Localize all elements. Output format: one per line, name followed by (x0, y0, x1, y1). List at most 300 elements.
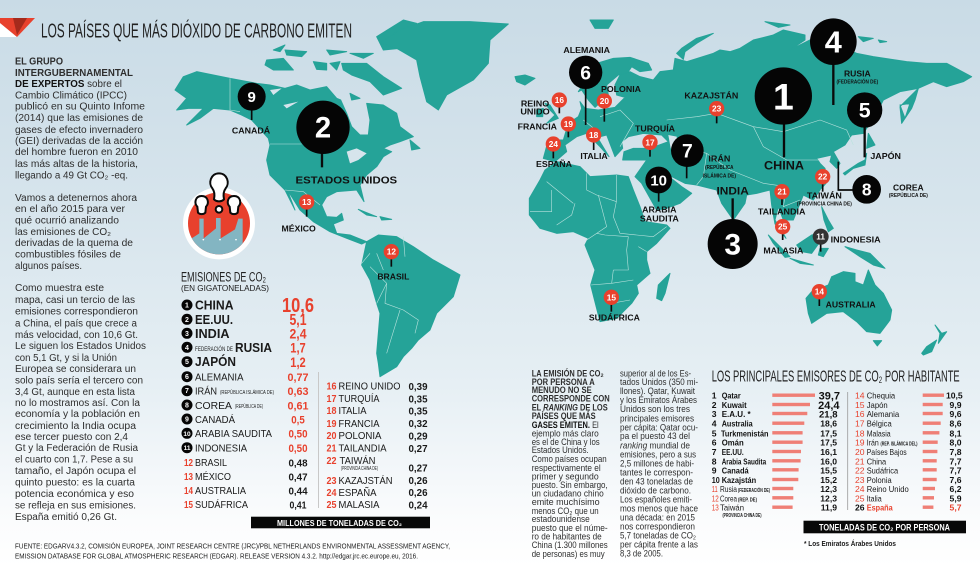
row Korea: 12 (712, 493, 719, 503)
row 8 Korea (182, 400, 308, 412)
row Netherlands: 7,8 (950, 447, 962, 457)
row 14 Australia (184, 485, 308, 497)
marker 22 Taiwan: 22 (818, 172, 828, 182)
row 20 Poland: 20 (326, 430, 337, 442)
land: Eurasia (543, 30, 972, 238)
row South Africa: Sudáfrica (867, 465, 898, 475)
row Italy: 5,9 (950, 493, 962, 503)
row 12 Brazil: 0,48 (288, 457, 308, 469)
text block: per-person emissions column 2: dióxido de carbono. (620, 484, 691, 495)
text block: per-person emissions column 2: una década: en 2015 (620, 511, 695, 522)
text block: per-person emissions column 1 (532, 367, 610, 559)
row Germany (855, 409, 962, 419)
label Kazakhstan: KAZAJSTÁN (684, 90, 738, 100)
row 1 China: CHINA (195, 298, 234, 313)
row 13 Mexico: 0,47 (288, 471, 308, 483)
text block: per-person emissions column 1: estadounidense (532, 513, 590, 524)
text block: year 2015: Vamos a detenernos ahora (15, 193, 137, 204)
text block: country analysis: ese tercer puesto con 2,4 (15, 432, 128, 443)
label Mexico: MÉXICO (281, 224, 316, 234)
row Spain: 5,7 (950, 503, 962, 513)
row 3 India (182, 326, 307, 342)
row China: 21 (855, 456, 865, 466)
land: islands (515, 20, 918, 301)
row USA: 7 (712, 447, 717, 457)
text block: IPCC intro: las más altas de la historia, (15, 159, 138, 170)
text block: per-person emissions column 2: emisiones, pero a sus (620, 448, 696, 459)
row 14 Australia: AUSTRALIA (195, 485, 246, 497)
row UK: Reino Unido (867, 484, 909, 494)
row Canada: Canadá (722, 465, 749, 475)
text block: per-person emissions column 2: per cápita: Qatar ocu- (620, 421, 698, 432)
row Russia: 12,3 (820, 484, 837, 494)
row 25 Malaysia: MALASIA (338, 499, 380, 511)
row 7 Iran (182, 384, 308, 398)
row 13 Mexico (184, 470, 308, 483)
marker 3 India: 3 (724, 229, 741, 262)
row 20 Poland (326, 430, 428, 442)
right ranking 14-26 (855, 391, 963, 513)
row 19 France: 19 (326, 418, 337, 430)
text block: per-person emissions column 2: tantes le correspon- (620, 466, 693, 477)
row 15 South Africa: 15 (184, 499, 193, 511)
row UAE (712, 409, 838, 420)
row Belgium: 8,6 (950, 419, 962, 429)
row Iran: 19 (855, 438, 865, 448)
row 9 Canada (182, 413, 305, 426)
row 23 Kazakhstan: 23 (326, 475, 337, 487)
text block: per-person emissions column 1: menos CO₂ que un (532, 505, 599, 516)
lakes (270, 88, 367, 163)
row Saudi Arabia (712, 456, 837, 466)
label Iran: ISLÁMICA DE) (703, 172, 736, 179)
row 25 Malaysia: 0,24 (408, 500, 428, 511)
map: Americas (175, 20, 508, 377)
row 5 Japan (182, 354, 306, 370)
row Malaysia: Malasia (867, 428, 891, 438)
row 9 Canada: 0,5 (291, 414, 305, 426)
row 2 USA (182, 312, 307, 329)
row 16 UK: REINO UNIDO (338, 380, 400, 392)
text block: per-person emissions column 2: 5,7 toneladas de CO₂ (620, 529, 696, 540)
row 13 Mexico: 13 (184, 471, 193, 483)
row Oman: Omán (722, 438, 744, 448)
row Canada: 15,5 (820, 465, 837, 475)
row 9 Canada: CANADÁ (195, 413, 235, 426)
text block: IPCC intro: llegando a 49 Gt CO₂ -eq. (15, 170, 128, 182)
label Russia (836, 68, 878, 86)
text block: country analysis: tamaño, el Japón ocupa el (15, 466, 136, 477)
row 8 Korea: 0,61 (288, 400, 308, 412)
marker 18 Italy (586, 127, 601, 150)
row Oman (712, 438, 837, 448)
row Russia: (FEDERACIÓN DE) (738, 486, 770, 494)
row 10 Saudi Arabia: 10 (183, 431, 191, 438)
row Netherlands: Países Bajos (867, 447, 907, 457)
marker 16 UK: 16 (555, 95, 564, 105)
row Oman: 6 (712, 438, 717, 448)
row Japan: 9,9 (950, 400, 962, 410)
row 1 China: 1 (185, 302, 189, 310)
heading: CO2 emissions (181, 270, 269, 293)
row 23 Kazakhstan: KAZAJSTÁN (338, 474, 392, 487)
row 19 France: 0,32 (408, 419, 428, 430)
marker 23 Kazakhstan (709, 101, 724, 123)
row Poland: 7,6 (950, 475, 962, 485)
text block: IPCC intro: gases de efecto invernadero (15, 125, 143, 136)
marker 1 China (755, 67, 812, 157)
row 2 USA: 5,1 (290, 312, 307, 329)
text block: country analysis: economía y la población en (15, 409, 140, 420)
row Kazakhstan (712, 475, 837, 485)
text block: per-person emissions column 2: 8,3 de 2005. (620, 547, 663, 558)
row 14 Australia: 0,44 (288, 485, 308, 497)
marker 5 Japan: 5 (859, 99, 871, 123)
row 18 Italy (326, 405, 428, 417)
row 22 Taiwan: 22 (326, 455, 337, 467)
label UK (520, 98, 550, 117)
row Korea: Corea (720, 493, 737, 503)
row Qatar: 1 (712, 391, 717, 401)
marker 24 Spain (546, 136, 561, 158)
label Japan: JAPÓN (870, 150, 901, 161)
text block: per-person emissions column 1: POR PERSONA A (532, 376, 595, 387)
row 6 Germany: ALEMANIA (195, 372, 244, 384)
row 7 Iran: (REPÚBLICA ISLÁMICA DE) (220, 389, 274, 396)
label China: CHINA (764, 158, 804, 172)
row 21 Thailand: 21 (326, 442, 337, 454)
label Brazil: BRASIL (377, 271, 409, 281)
text block: per-person emissions column 1: emite muchísimo (532, 496, 600, 507)
label Poland: POLONIA (601, 84, 641, 94)
marker 16 UK (552, 92, 567, 113)
row Kazakhstan: Kazajstán (722, 475, 756, 485)
text block: IPCC intro: EL GRUPO (15, 56, 63, 68)
text block: country analysis: con 5,1 Gt, y si la Unión (15, 353, 117, 364)
text block: per-person emissions column 2: principales emisores (620, 412, 694, 423)
text block: country analysis: Europea se considerara un (15, 364, 136, 375)
text block: country analysis (15, 283, 146, 523)
row Korea (712, 493, 837, 503)
text block: per-person emissions column 2 (620, 367, 698, 558)
row Australia: Australia (722, 419, 753, 429)
row Saudi Arabia: 16,0 (820, 456, 837, 466)
label Korea: COREA (893, 182, 924, 192)
row China: 7,7 (950, 456, 962, 466)
marker 20 Poland: 20 (600, 96, 609, 106)
text block: per-person emissions column 2: Los españoles emiti- (620, 493, 692, 504)
label UK: REINO (521, 98, 550, 108)
label Taiwan (797, 190, 852, 208)
marker 23 Kazakhstan: 23 (712, 104, 722, 114)
row 24 Spain: ESPAÑA (338, 486, 376, 499)
row 11 Indonesia: INDONESIA (195, 442, 247, 454)
row Canada (712, 465, 837, 475)
text block: year 2015: las emisiones de CO₂ (15, 227, 111, 238)
marker 24 Spain: 24 (549, 139, 558, 149)
marker 18 Italy: 18 (589, 130, 599, 140)
text block: IPCC intro: del hombre fueron en 2010 (15, 147, 138, 158)
row 21 Thailand (326, 442, 428, 455)
row Russia: Rusia (720, 484, 737, 494)
row Czechia (855, 391, 963, 401)
row Oman: 17,5 (820, 438, 837, 448)
row 3 India: INDIA (195, 326, 230, 341)
row Czechia: 10,5 (946, 391, 963, 401)
row 7 Iran: 7 (185, 388, 189, 395)
marker 14 Australia: 14 (815, 287, 824, 297)
text block: IPCC intro: DE EXPERTOS sobre el (15, 79, 122, 90)
row 19 France (326, 418, 428, 430)
text block: per-person emissions column 2: pa el puesto 43 del (620, 430, 690, 441)
marker 3 India (708, 198, 758, 269)
label South Africa: SUDÁFRICA (589, 312, 640, 322)
marker 14 Australia (812, 284, 827, 306)
text block: per-person emissions column 1: puesto. Sin embargo, (532, 479, 608, 490)
text block: year 2015: qué ocurrió analizando (15, 216, 119, 226)
row Iran: (REP. ISLÁMICA DEL) (880, 441, 918, 448)
text block: per-person emissions column 1: China (1.300 millones (532, 539, 608, 550)
row UK (855, 484, 962, 494)
row 4 Russia: 4 (185, 345, 189, 352)
row 21 Thailand: 0,27 (408, 444, 428, 455)
row 16 UK: 0,39 (408, 382, 428, 393)
text block: country analysis: mapa, casi un tercio de las (15, 295, 135, 306)
row 10 Saudi Arabia (182, 428, 308, 441)
row 22 Taiwan: (PROVINCIA CHINA DE) (341, 466, 378, 472)
text block: per-person emissions column 2: Unidos son los tres (620, 403, 690, 414)
text block: IPCC intro: INTERGUBERNAMENTAL (15, 68, 133, 79)
row Turkmenistan: 5 (712, 428, 717, 438)
row 8 Korea: (REPÚBLICA DE) (235, 403, 263, 410)
label Spain: ESPAÑA (536, 159, 572, 169)
label Turkey: TURQUÍA (635, 124, 675, 134)
label USA: ESTADOS UNIDOS (295, 175, 397, 186)
row Kuwait (712, 400, 840, 412)
marker 5 Japan (847, 92, 882, 157)
text block: per-person emissions column 1: respectivamente el (532, 462, 601, 473)
text block: year 2015: combustibles fósiles de (15, 250, 121, 260)
inland seas (603, 95, 678, 152)
text block: per-person emissions column 2: 2,5 millones de habi- (620, 457, 694, 468)
text block: per-person emissions column 2: superior al de los Es- (620, 367, 691, 378)
land: Africa (529, 162, 670, 322)
row Canada: 9 (712, 465, 717, 475)
markers and labels: Americas (183, 83, 409, 281)
heading: CO2 emissions: EMISIONES DE CO₂ (181, 270, 266, 284)
marker 13 Mexico: 13 (302, 197, 312, 207)
marker 6 Germany: 6 (580, 63, 591, 84)
row Italy (855, 493, 962, 503)
row Japan (855, 400, 962, 410)
label Italy: ITALIA (580, 151, 608, 161)
text block: per-person emissions column 1: GASES EMITEN. El (532, 419, 599, 430)
row Japan: Japón (867, 400, 888, 410)
label Saudi Arabia: SAUDITA (640, 214, 679, 224)
marker 9 Canada: 9 (247, 89, 256, 106)
row 7 Iran: 0,63 (288, 386, 308, 398)
row 25 Malaysia (326, 499, 428, 511)
row Belgium: 17 (855, 419, 865, 429)
panel: CO2 emissions ranking (181, 270, 430, 528)
row 15 South Africa: 0,41 (290, 499, 307, 511)
row UAE: 21,8 (819, 410, 838, 420)
row 14 Australia: 14 (184, 485, 193, 497)
panel: main emitters per inhabitant (712, 368, 966, 548)
row 4 Russia: 1,7 (290, 340, 306, 356)
text block: year 2015 (15, 193, 137, 272)
row 6 Germany: 0,77 (288, 372, 308, 384)
text block: year 2015: algunos países. (15, 261, 82, 272)
row 11 Indonesia: 11 (184, 445, 191, 452)
text block: year 2015: en el año 2015 para ver (15, 204, 126, 215)
marker 6 Germany (569, 56, 602, 125)
row Kazakhstan: 10 (712, 475, 720, 485)
row 4 Russia: RUSIA (235, 340, 273, 355)
marker 4 Russia (810, 18, 857, 105)
left ranking 1-13 (712, 390, 840, 519)
row 2 USA: EE.UU. (195, 312, 233, 327)
label Russia: (FEDERACIÓN DE) (836, 78, 878, 86)
row 24 Spain (326, 486, 428, 499)
row Turkmenistan: Turkmenistán (721, 428, 768, 438)
text block: per-person emissions column 1: es el de China y los (532, 436, 600, 447)
marker 20 Poland (597, 93, 612, 122)
marker 17 Turkey: 17 (645, 137, 655, 147)
text block: IPCC intro: (GEI) derivadas de la acción (15, 136, 143, 147)
row 24 Spain: 0,26 (408, 488, 428, 499)
row Spain: España (867, 503, 893, 513)
text block: per-person emissions column 1: Como países ocupan (532, 453, 607, 464)
row Italy: Italia (867, 493, 882, 503)
marker 9 Canada (238, 83, 266, 120)
text block: per-person emissions column 1: primer y segundo (532, 470, 599, 481)
marker 7 Iran (671, 134, 704, 178)
text block: per-person emissions column 1: ro de habitantes de (532, 530, 602, 541)
marker 11 Indonesia (813, 229, 829, 252)
marker 15 South Africa: 15 (607, 292, 616, 302)
text block: country analysis: Le siguen los Estados Unidos (15, 341, 146, 352)
row Taiwan: 11,9 (821, 503, 837, 513)
borders: Americas (230, 78, 418, 353)
logo: red triangle (0, 18, 35, 37)
text block: country analysis: 3,4 Gt, aunque en esta lista (15, 387, 135, 398)
row Qatar (712, 390, 840, 402)
label Australia: AUSTRALIA (826, 299, 876, 309)
row Taiwan: 13 (712, 503, 719, 513)
label Thailand: TAILANDIA (758, 207, 805, 217)
text block: per-person emissions column 2: tados Unidos (350 mi- (620, 376, 698, 387)
row 2 USA: 2 (185, 317, 189, 324)
row 22 Taiwan: 0,27 (408, 463, 428, 474)
unit bar: tonnes per person (804, 521, 966, 533)
row Belgium: Bélgica (867, 419, 892, 429)
land: Greenland (380, 22, 508, 110)
row Italy: 25 (855, 493, 865, 503)
heading: CO2 emissions: (EN GIGATONELADAS) (181, 284, 269, 293)
text block: year 2015: derivadas de la quema de (15, 238, 133, 249)
label UK: UNIDO (520, 107, 550, 117)
row 23 Kazakhstan (326, 474, 428, 487)
label Iran: IRÁN (708, 153, 730, 163)
row 17 Turkey (326, 392, 428, 405)
row Netherlands (855, 447, 962, 457)
row 16 UK (326, 380, 428, 393)
marker 25 Malaysia (775, 219, 790, 240)
row Turkmenistan: 17,5 (820, 428, 837, 438)
unit bar: millions of tonnes: MILLONES DE TONELADAS DE CO₂ (277, 518, 402, 528)
marker 10 Saudi Arabia (645, 167, 672, 202)
row South Africa (855, 465, 962, 475)
marker 11 Indonesia: 11 (816, 232, 825, 242)
row 3 India: 2,4 (290, 326, 307, 342)
marker 13 Mexico (299, 194, 314, 217)
row 9 Canada: 9 (185, 416, 189, 424)
row 13 Mexico: MÉXICO (195, 470, 231, 483)
marker 15 South Africa (604, 290, 619, 312)
marker 21 Thailand (774, 184, 790, 205)
text block: country analysis: España emitió 0,26 Gt. (15, 512, 117, 523)
text block: IPCC intro: publicó en su Quinto Infome (15, 102, 145, 113)
row South Africa: 7,7 (950, 465, 962, 475)
marker 19 France: 19 (564, 119, 573, 129)
text block: per-person emissions column 2: mos menos que hace (620, 502, 698, 513)
row 4 Russia (182, 340, 306, 356)
text block: country analysis: no lo mostramos así. Con la (15, 398, 140, 409)
title: LOS PAÍSES QUE MÁS DIÓXIDO DE CARBONO EMITEN (41, 20, 352, 42)
marker 19 France (561, 116, 576, 137)
row 10 Saudi Arabia: 0,50 (288, 429, 308, 441)
row Qatar: 39,7 (819, 390, 840, 402)
row Taiwan: Taiwán (720, 503, 744, 513)
row 1 China: 10,6 (282, 295, 314, 317)
row China: China (867, 456, 886, 466)
row 25 Malaysia: 25 (326, 499, 337, 511)
text block: per-person emissions column 2: per cápita frente a las (620, 538, 698, 549)
label Korea: (REPÚBLICA DE) (889, 192, 928, 199)
row Poland: 23 (855, 475, 865, 485)
text block: country analysis: crecimiento la India ocupa (15, 421, 136, 432)
text block: per-person emissions column 1: un ciudadano chino (532, 487, 604, 498)
row Kazakhstan: 15,2 (820, 475, 837, 485)
label Saudi Arabia: ARABIA (642, 204, 676, 214)
row 5 Japan: 1,2 (290, 354, 306, 370)
label India: INDIA (716, 186, 749, 198)
text block: country analysis: solo país sería el tercero con (15, 376, 143, 386)
land: New Zealand (922, 325, 947, 355)
marker 12 Brazil (384, 244, 399, 267)
land: Arctic islands (265, 20, 420, 220)
label France: FRANCIA (518, 122, 557, 132)
text block: per-person emissions column 2: llones). Qatar, Kuwait (620, 385, 695, 396)
text block: country analysis: Gt y la Federación de Rusia (15, 443, 138, 454)
row Netherlands: 20 (855, 447, 865, 457)
row 1 China (182, 295, 314, 317)
row Belgium (855, 419, 962, 429)
row Iran: Irán (867, 438, 879, 448)
text block: country analysis: más velocidad, con 10,6 Gt. (15, 330, 138, 341)
text block: per-person emissions column 1: EL RANKING DE LOS (532, 401, 608, 412)
marker 17 Turkey (642, 135, 658, 157)
row Turkmenistan (712, 428, 837, 438)
row Australia: 18,6 (820, 419, 837, 429)
row 17 Turkey: TURQUÍA (338, 392, 380, 405)
marker 21 Thailand: 21 (777, 187, 787, 197)
row Malaysia (855, 428, 962, 438)
text block: per-person emissions column 1: de personas) es muy (532, 548, 605, 559)
row Australia: 4 (712, 419, 717, 429)
label Iran: (REPÚBLICA (705, 164, 733, 171)
